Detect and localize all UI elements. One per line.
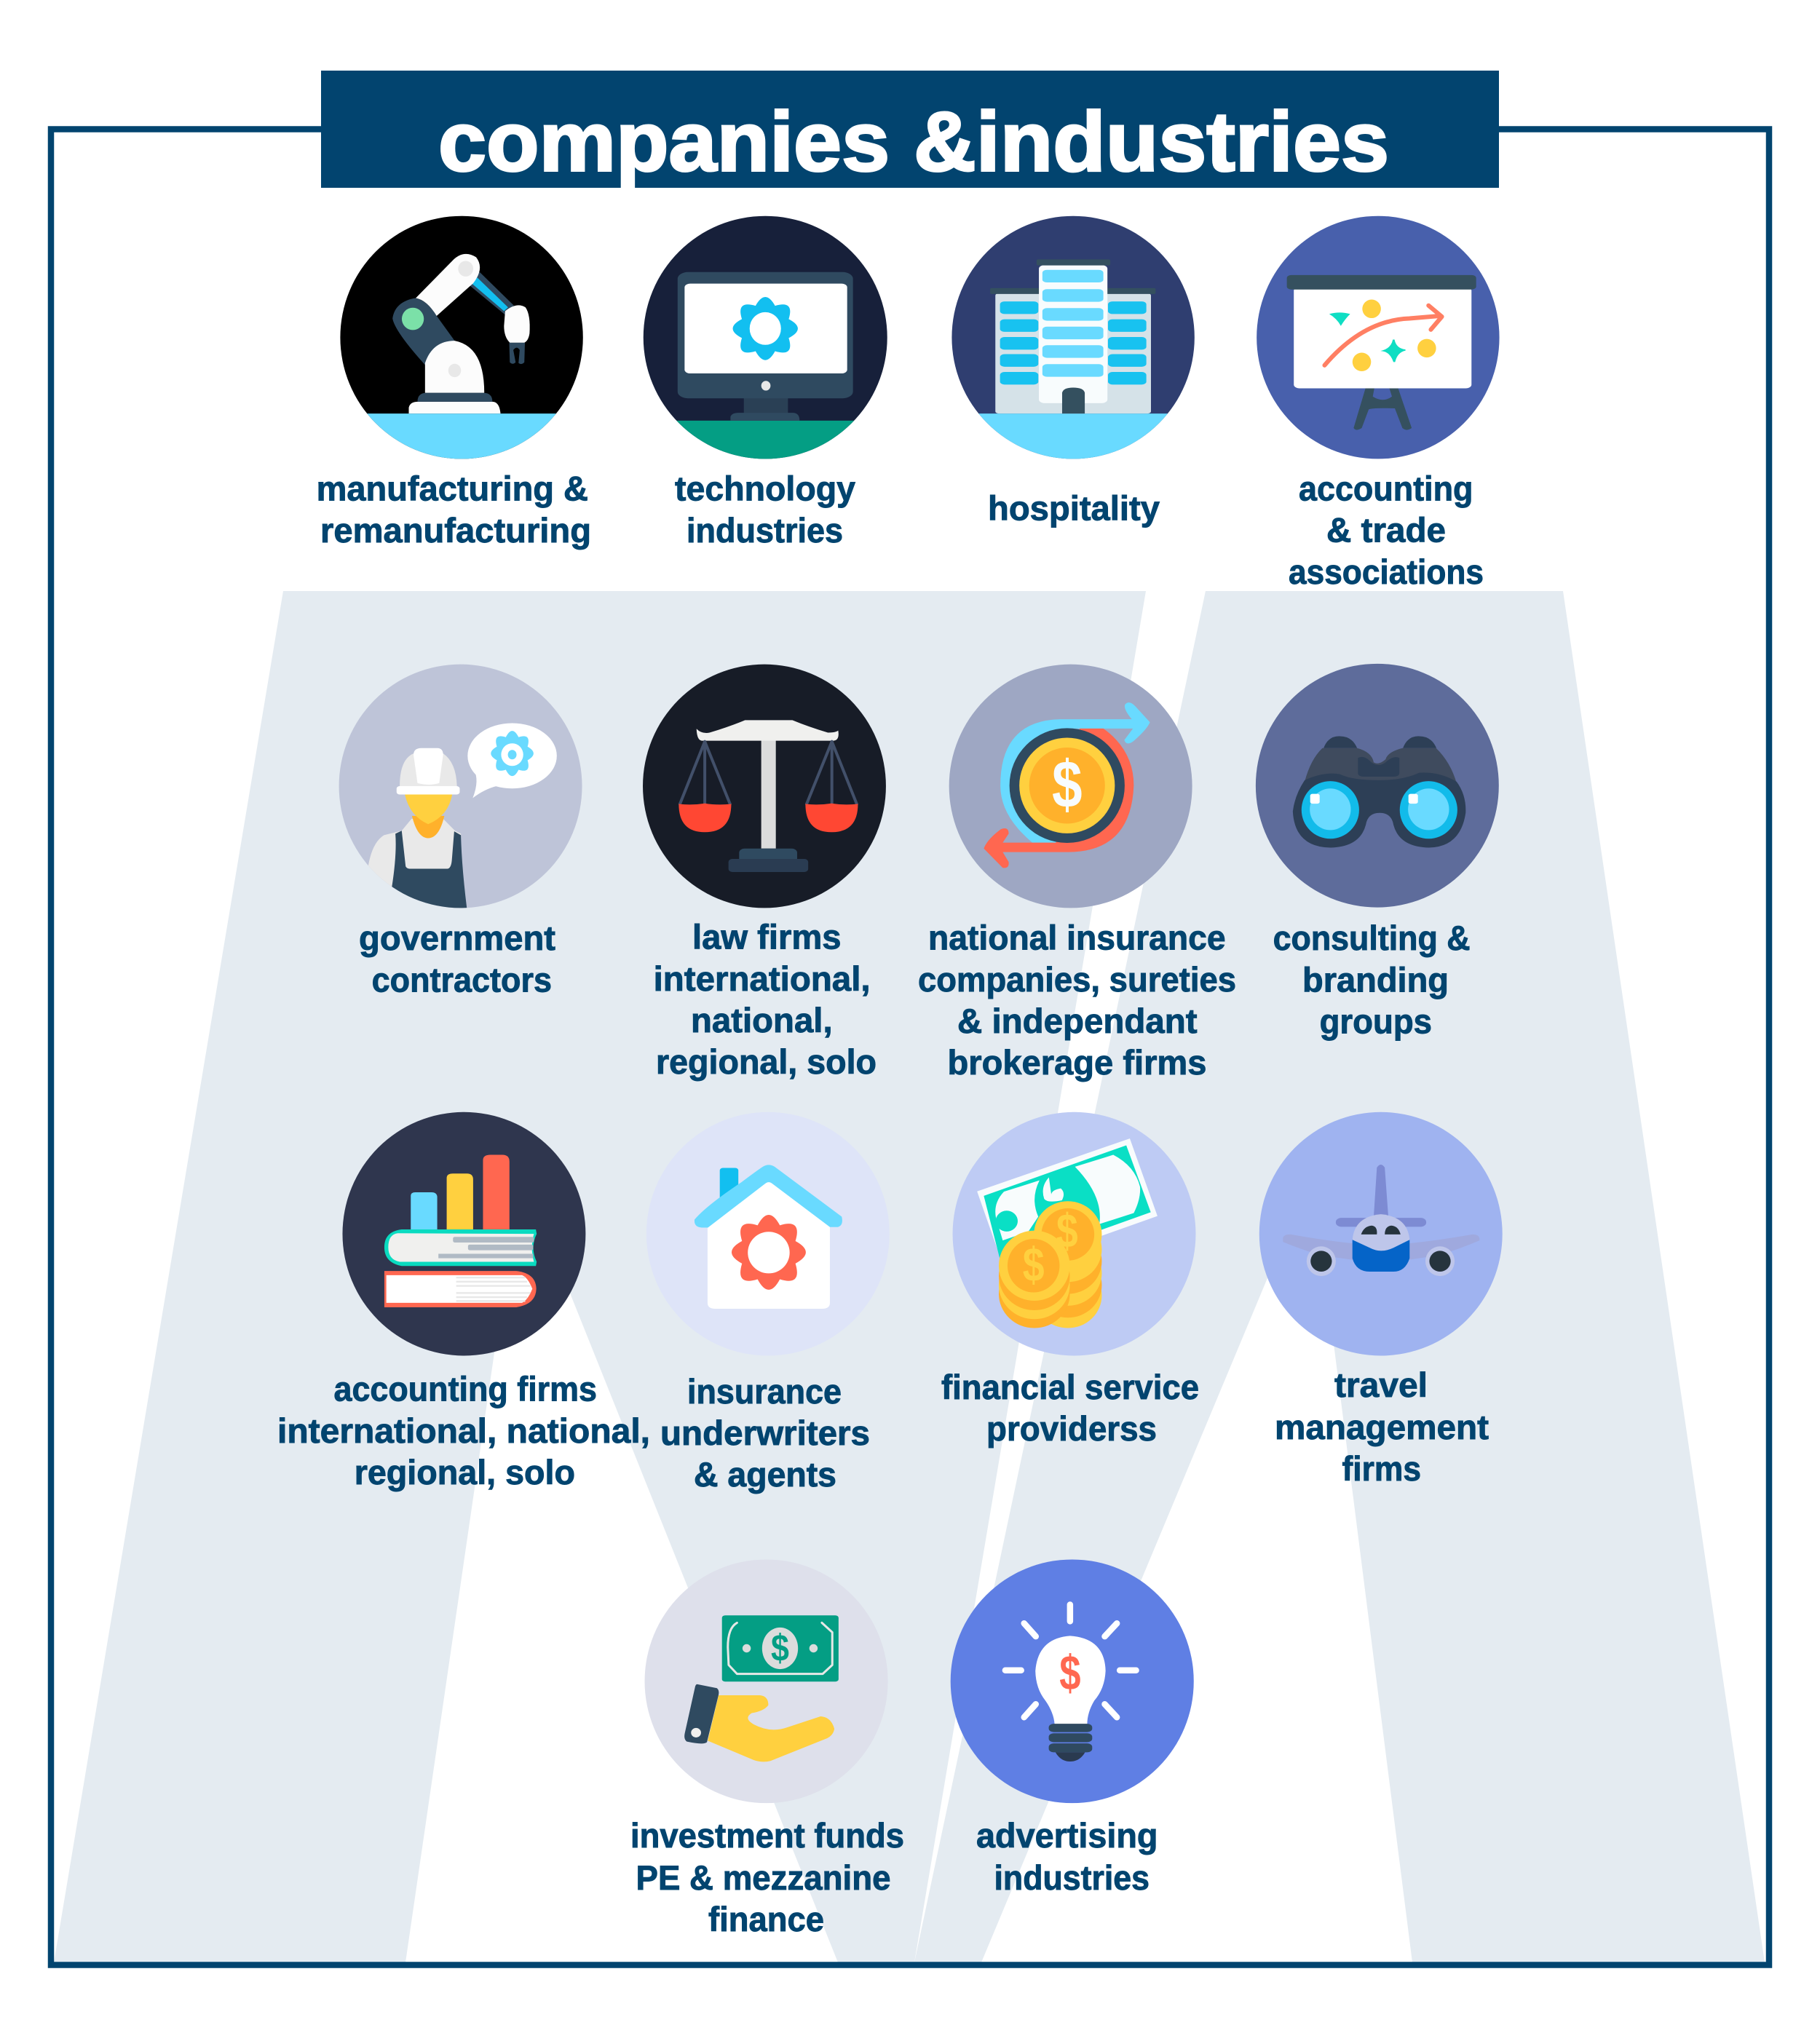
icon: binoculars — [1256, 664, 1499, 908]
label: accounting and trade associations: & trade — [1326, 511, 1446, 550]
label: consulting and branding — [1273, 919, 1471, 1041]
icon: banknote and coins: $ — [1023, 1238, 1045, 1291]
label: law firms: national, — [691, 1001, 833, 1039]
icon: light bulb: $ — [1059, 1645, 1081, 1700]
icon: coin with arrows — [949, 665, 1192, 908]
panel: law firms — [643, 665, 886, 1081]
label: travel management: management — [1275, 1408, 1489, 1446]
label: accounting and trade associations — [1289, 469, 1484, 591]
panel: consulting and branding — [1256, 664, 1499, 1041]
label: national insurance companies: companies, sureties — [918, 960, 1236, 999]
icon: monitor with gear — [638, 216, 894, 461]
panel: advertising — [951, 1559, 1194, 1897]
label: accounting and trade associations: associations — [1289, 552, 1484, 591]
label: technology — [675, 469, 855, 550]
icon: hotel building — [945, 216, 1200, 461]
title banner — [321, 71, 1499, 189]
panel: investment funds — [630, 1559, 904, 1938]
label: accounting firms: international, national, — [277, 1411, 650, 1450]
label: manufacturing: manufacturing & — [317, 469, 588, 508]
title banner: companies &industries — [438, 95, 1389, 189]
label: government contractors: contractors — [372, 961, 552, 999]
icon: hand with banknote — [645, 1559, 888, 1803]
label: travel management: travel — [1334, 1366, 1428, 1404]
icon: house with gear — [646, 1112, 890, 1355]
label: national insurance companies: & independant — [957, 1002, 1198, 1040]
label: government contractors: government — [359, 919, 555, 957]
icon: balance scales — [643, 665, 886, 908]
label: law firms: law firms — [692, 917, 842, 956]
label: insurance underwriters: underwriters — [660, 1414, 870, 1452]
label: travel management: firms — [1342, 1449, 1421, 1488]
label: insurance underwriters: & agents — [694, 1455, 836, 1494]
icon: light bulb — [951, 1559, 1194, 1803]
panel: insurance underwriters — [646, 1112, 890, 1494]
label: national insurance companies — [918, 919, 1236, 1082]
panel: accounting firms — [277, 1112, 650, 1491]
label: technology: industries — [687, 511, 843, 550]
label: financial service providers — [941, 1368, 1199, 1448]
label: manufacturing — [317, 469, 591, 550]
panel: government contractors — [339, 665, 582, 999]
icon: coin with arrows: $ — [1052, 747, 1083, 822]
label: technology: technology — [675, 469, 855, 508]
label: investment funds — [630, 1816, 904, 1938]
label: national insurance companies: national insurance — [928, 919, 1226, 956]
panel: hospitality — [945, 216, 1200, 528]
panel: technology — [638, 216, 894, 550]
label: law firms: international, — [654, 959, 871, 998]
label: law firms — [654, 917, 877, 1081]
label: advertising — [976, 1816, 1158, 1897]
background shape: pale letter M — [54, 591, 1765, 1962]
label: accounting firms — [277, 1370, 650, 1491]
icon: banknote and coins: $ — [1056, 1204, 1078, 1258]
icon: construction worker — [339, 665, 582, 911]
label: financial service providers: providerss — [986, 1409, 1157, 1448]
panel: accounting and trade associations — [1257, 216, 1500, 591]
label: insurance underwriters — [660, 1372, 870, 1494]
icon: banknote and coins — [953, 1112, 1195, 1355]
label: consulting and branding: consulting & — [1273, 919, 1471, 957]
panel: manufacturing — [317, 216, 598, 550]
icon: presentation board — [1257, 216, 1500, 459]
panel: financial service providers — [941, 1112, 1199, 1448]
icon: airplane — [1259, 1112, 1503, 1355]
label: financial service providers: financial service — [941, 1368, 1199, 1406]
label: government contractors — [359, 919, 555, 999]
label: accounting and trade associations: accounting — [1299, 469, 1473, 508]
icon: robot arm — [340, 215, 583, 459]
label: travel management — [1275, 1366, 1489, 1488]
label: investment funds: PE & mezzanine — [636, 1858, 891, 1897]
label: advertising: industries — [994, 1858, 1150, 1897]
label: investment funds: investment funds — [630, 1816, 904, 1855]
label: law firms: regional, solo — [656, 1042, 877, 1081]
label: manufacturing: remanufacturing — [320, 511, 591, 550]
label: investment funds: finance — [708, 1900, 824, 1938]
panel: national insurance companies — [918, 665, 1236, 1082]
label: hospitality: hospitality — [988, 489, 1160, 528]
label: accounting firms: regional, solo — [355, 1453, 575, 1491]
panel: travel management — [1259, 1112, 1503, 1488]
label: advertising: advertising — [976, 1816, 1158, 1855]
label: accounting firms: accounting firms — [333, 1370, 597, 1408]
label: consulting and branding: branding — [1302, 961, 1449, 999]
icon: hand with banknote: $ — [771, 1627, 789, 1669]
label: consulting and branding: groups — [1320, 1002, 1432, 1041]
label: insurance underwriters: insurance — [687, 1372, 842, 1411]
label: national insurance companies: brokerage firms — [948, 1043, 1207, 1082]
icon: books and bar chart — [342, 1112, 585, 1355]
